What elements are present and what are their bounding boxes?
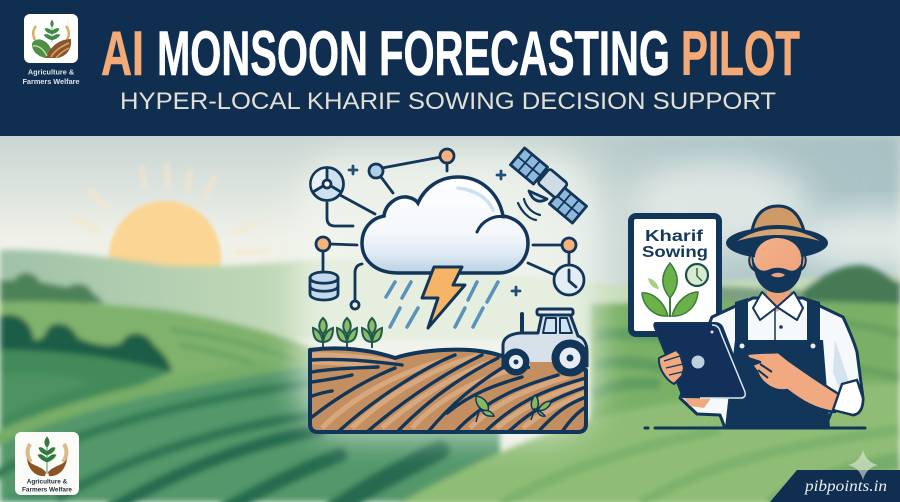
front-left hill: [0, 350, 172, 445]
rain: [386, 282, 498, 327]
card: Kharif Sowing: Sowing: [642, 244, 708, 261]
rolled cuff: [833, 380, 863, 415]
left hand: [659, 350, 684, 384]
icon: database and node: [310, 237, 357, 300]
dark tree line: [0, 314, 172, 372]
title: AI: [101, 19, 144, 89]
card: Kharif Sowing: [631, 216, 719, 334]
central illustration: cloud, data network and field: [305, 148, 590, 435]
icon: storm cloud: [362, 177, 528, 273]
far hills: [0, 250, 900, 340]
icon: sparkle: [848, 450, 878, 480]
tablet: [654, 323, 747, 398]
left wrist: [683, 397, 712, 408]
subtitle: HYPER-LOCAL KHARIF SOWING DECISION SUPPORT: [120, 88, 776, 115]
icon: satellite: [510, 148, 587, 223]
hat top and crown: [737, 206, 820, 241]
hat brim: [726, 227, 828, 259]
sun rays: [75, 165, 267, 252]
icon: clock and node: [528, 238, 584, 295]
shirt and sleeves: [680, 298, 863, 428]
icon: seedlings: [313, 318, 382, 348]
ears: [749, 254, 806, 270]
header banner: [0, 0, 900, 136]
icon: field sprouts: [476, 395, 551, 422]
network icons: [310, 148, 587, 309]
top logo: Agriculture & Farmers Welfare: Farmers Welfare: [22, 77, 80, 86]
pointing arm: [747, 352, 842, 412]
icon: radar wheel: [310, 168, 344, 200]
sleeve shading: [833, 340, 856, 408]
bottom-left logo: Agriculture &: [27, 478, 68, 486]
face: [755, 238, 801, 292]
collar: [753, 292, 803, 320]
beard: [754, 262, 802, 293]
icon: lightning bolt: [422, 267, 465, 328]
overall buttons: [740, 344, 744, 348]
ground line: [645, 426, 865, 430]
mid field: [0, 301, 320, 460]
central halo: [298, 152, 598, 436]
blurred farmland background: [0, 135, 900, 502]
bright right-hand field: [398, 384, 900, 502]
icon: small clock: [686, 264, 708, 286]
top logo: Agriculture & Farmers Welfare: Agriculture &: [28, 68, 75, 76]
bottom-left logo: Farmers Welfare: [22, 486, 72, 494]
striped foreground: [0, 356, 500, 502]
watermark badge: pibpoints.in: pibpoints.in: [804, 478, 887, 495]
overalls: [725, 298, 830, 428]
top logo: Agriculture & Farmers Welfare: [22, 14, 80, 86]
icon: connected nodes: [369, 149, 454, 193]
bottom-left logo: [15, 432, 79, 495]
farmer with tablet and Kharif Sowing card: [631, 206, 865, 428]
ploughed field: [305, 340, 590, 435]
watermark badge: pibpoints.in: [770, 450, 900, 502]
neck: [767, 284, 790, 312]
icon: tractor: [503, 309, 587, 375]
title: PILOT: [681, 19, 800, 89]
card: Kharif Sowing: Kharif: [645, 228, 704, 245]
icon: plant: [642, 263, 698, 317]
